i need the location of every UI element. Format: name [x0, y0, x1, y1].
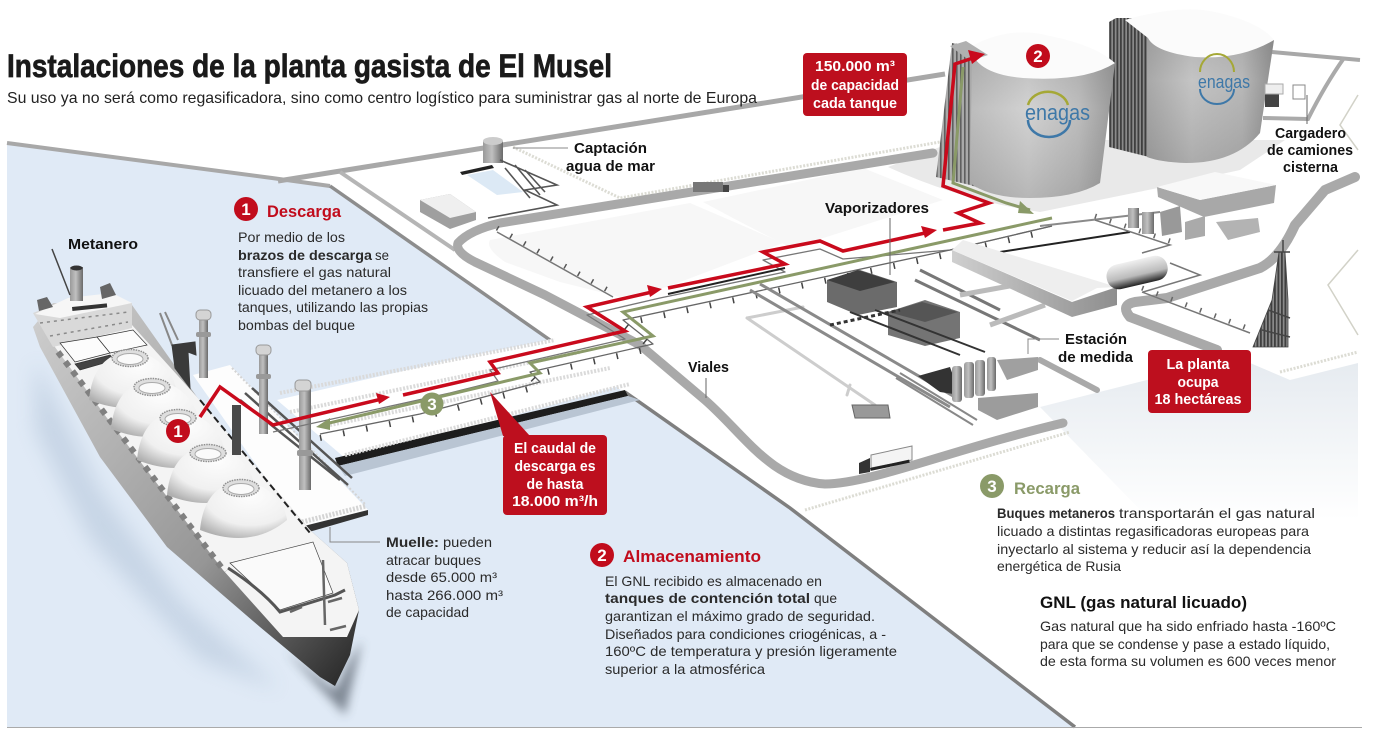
text block: descarga: brazos de descarga — [238, 247, 372, 263]
text block: recarga: Recarga — [1014, 479, 1081, 498]
label: vaporizadores — [825, 201, 929, 275]
right boundary marks — [1328, 95, 1358, 335]
text block: muelle: atracar buques — [386, 552, 481, 568]
number marker 3 on pipeline: 3 — [427, 395, 437, 414]
text block: almacenamiento: 2 — [597, 546, 607, 565]
long building — [952, 240, 1117, 317]
callout: caudal: de hasta — [526, 477, 584, 493]
text block: descarga: tanques, utilizando las propias — [238, 299, 428, 315]
ship — [33, 249, 362, 715]
funnel and mast — [37, 249, 116, 311]
callout: caudal: El caudal de — [514, 441, 596, 457]
tanker truck road — [693, 182, 729, 192]
text block: descarga: Descarga — [267, 202, 342, 221]
title: Instalaciones de la planta gasista de El Musel — [7, 48, 612, 84]
text block: muelle: de capacidad — [386, 604, 469, 620]
text block: almacenamiento: Almacenamiento — [623, 547, 761, 566]
callout: caudal: 18.000 m³/h — [512, 494, 598, 510]
text block: almacenamiento — [590, 543, 897, 677]
sea — [7, 143, 1075, 727]
text block: muelle: Muelle: — [386, 534, 439, 550]
crane — [160, 312, 196, 388]
horizontal tank — [1104, 253, 1170, 292]
text block: gnl: de esta forma su volumen es 600 veces menor — [1040, 653, 1336, 669]
hull — [33, 303, 359, 686]
perimeter fences — [513, 142, 1358, 510]
text block: recarga — [980, 474, 1315, 574]
ship shadow — [35, 360, 280, 690]
text block: gnl: GNL (gas natural licuado) — [1040, 594, 1247, 612]
label: estacion de medida: de medida — [1058, 350, 1134, 366]
text block: almacenamiento: que — [814, 590, 837, 606]
text block: descarga: bombas del buque — [238, 317, 355, 333]
vaporizers — [827, 270, 985, 355]
logo enagas: enagas — [1025, 100, 1090, 125]
text block: recarga: licuado a distintas regasificadoras europeas para — [997, 523, 1309, 539]
callout: capacidad: cada tanque — [813, 96, 897, 112]
unloading towers — [196, 310, 313, 490]
logo enagas — [1198, 54, 1250, 104]
wharf platform — [193, 365, 368, 534]
label: estacion de medida — [1028, 332, 1134, 366]
text block: almacenamiento: Diseñados para condiciones criogénicas, a - — [605, 626, 886, 642]
callout: capacidad: 150.000 m³ — [815, 59, 895, 75]
label: cargadero: cisterna — [1283, 160, 1339, 176]
text block: descarga — [234, 197, 428, 333]
callout: capacidad: de capacidad — [811, 78, 899, 94]
seawater intake — [460, 137, 557, 218]
interior fence — [497, 216, 1250, 333]
text block: almacenamiento: El GNL recibido es almacenado en — [605, 573, 822, 589]
callout: caudal — [490, 392, 607, 515]
pipe rack — [273, 212, 1160, 438]
label: cargadero — [1267, 95, 1353, 176]
number marker 2 on tank: 2 — [1033, 47, 1043, 66]
text block: almacenamiento: garantizan el máximo grado de seguridad. — [605, 608, 875, 624]
text block: recarga: 3 — [987, 477, 997, 496]
truck loading bay — [1263, 58, 1344, 119]
text block: recarga: transportarán el gas natural — [1119, 505, 1315, 521]
callout: hectareas: 18 hectáreas — [1154, 392, 1242, 408]
text block: muelle: desde 65.000 m³ — [386, 569, 497, 585]
gas domes — [89, 350, 287, 538]
number marker 1 on ship: 1 — [173, 422, 183, 441]
text block: descarga: Por medio de los — [238, 229, 345, 245]
text block: gnl: Gas natural que ha sido enfriado hasta -160ºC — [1040, 618, 1336, 634]
red route: gas unloading and storage — [200, 50, 989, 425]
process pipes — [852, 270, 1045, 418]
lattice tower — [1253, 240, 1290, 347]
label: viales — [688, 360, 729, 398]
text block: recarga: inyectarlo al sistema y reducir así la dependencia — [997, 541, 1311, 557]
callout: hectareas: ocupa — [1178, 375, 1219, 391]
logo enagas — [1025, 92, 1090, 137]
deck hatches — [60, 330, 333, 610]
number marker 2 on tank — [1026, 44, 1050, 68]
road truck — [859, 446, 912, 474]
text block: descarga: 1 — [241, 200, 251, 219]
number marker 1 on ship — [166, 419, 190, 443]
label: captacion: Captación — [574, 141, 647, 157]
callout: hectareas: La planta — [1166, 357, 1230, 373]
text block: descarga: licuado del metanero a los — [238, 282, 407, 298]
callout: caudal: descarga es — [514, 459, 596, 475]
ancillary buildings — [1128, 172, 1276, 240]
label: viales: Viales — [688, 360, 729, 376]
paved areas — [489, 140, 1358, 520]
number marker 3 on pipeline — [420, 392, 444, 416]
subtitle: Su uso ya no será como regasificadora, sino como centro logístico para suministrar gas al norte de Europa — [7, 90, 757, 107]
text block: recarga: energética de Rusia — [997, 558, 1121, 574]
deck — [52, 325, 359, 637]
label: cargadero: de camiones — [1267, 143, 1353, 159]
text block: muelle: pueden — [443, 534, 492, 550]
metering station — [896, 357, 1038, 425]
text block: gnl — [1040, 594, 1336, 669]
warehouse — [420, 194, 476, 229]
superstructure — [33, 293, 132, 347]
text block: almacenamiento: tanques de contención total — [605, 590, 810, 606]
green route: gas reload — [316, 67, 1052, 430]
text block: muelle — [330, 527, 503, 620]
jetty — [277, 337, 640, 476]
callout: capacidad — [803, 53, 907, 116]
logo enagas: enagas — [1198, 72, 1250, 92]
text block: descarga: transfiere el gas natural — [238, 264, 391, 280]
bottom rule — [7, 726, 1362, 728]
label: cargadero: Cargadero — [1275, 126, 1346, 142]
storage tank 2 — [1109, 9, 1274, 163]
storage tank 1 — [936, 32, 1115, 198]
callout: hectareas — [1148, 350, 1251, 413]
text block: gnl: para que se condense y pase a estado líquido, — [1040, 636, 1330, 652]
text block: almacenamiento: 160ºC de temperatura y presión ligeramente — [605, 643, 897, 659]
text block: almacenamiento: superior a la atmosférica — [605, 661, 765, 677]
text block: muelle: hasta 266.000 m³ — [386, 587, 503, 603]
label: vaporizadores: Vaporizadores — [825, 201, 929, 217]
label: captacion — [513, 141, 655, 175]
deck side dashes — [200, 400, 310, 533]
side boxes — [58, 352, 225, 572]
label: estacion de medida: Estación — [1065, 332, 1127, 348]
text block: descarga: se — [375, 247, 389, 263]
roads — [458, 153, 1355, 484]
text block: recarga: Buques metaneros — [997, 505, 1115, 521]
label: metanero: Metanero — [68, 237, 138, 253]
label: captacion: agua de mar — [566, 159, 655, 175]
